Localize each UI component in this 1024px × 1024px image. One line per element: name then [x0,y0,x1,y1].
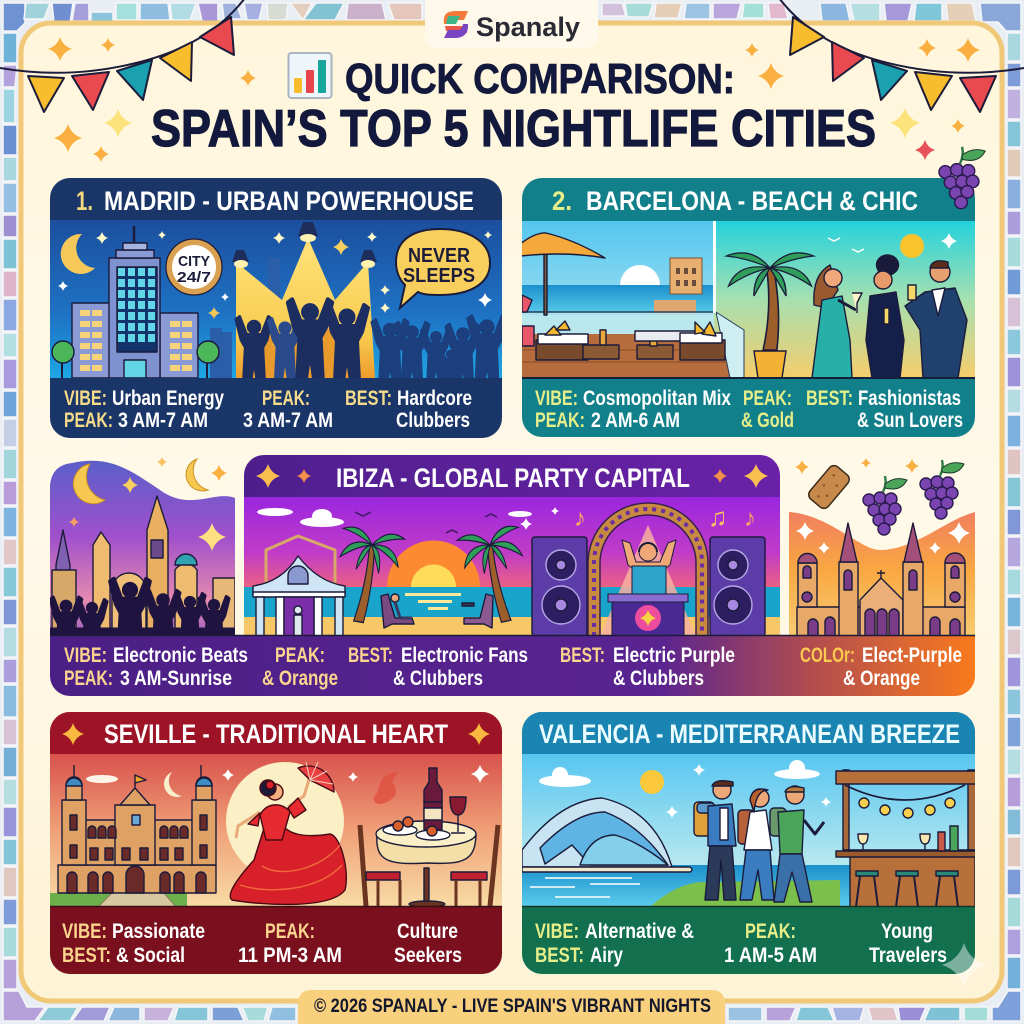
flamenco dancer [230,762,346,904]
Valencia stats: Alternative & [585,920,694,943]
Ibiza stats: & Clubbers [393,667,483,690]
bunting right [779,0,1024,112]
spotlights [232,222,377,378]
Valencia scene [522,754,976,907]
music notes: ♪ [574,505,586,532]
Ibiza footer band [50,636,975,696]
Madrid stats: Hardcore [397,387,472,410]
Barcelona stats: Cosmopolitan Mix [583,387,731,410]
Madrid heading: MADRID - URBAN POWERHOUSE [104,186,474,216]
Madrid stats: VIBE: [64,387,107,410]
beach chairs [381,594,493,628]
sparkles right [795,458,919,474]
icon: grapes [920,460,964,519]
Ibiza cathedral [797,523,965,636]
backpackers [694,781,824,902]
moon and stars [157,457,227,491]
Barcelona stats: BEST: [806,387,853,410]
Ibiza heading: IBIZA - GLOBAL PARTY CAPITAL [336,463,690,493]
music notes: ♪ [744,505,756,532]
Ibiza stats: 3 AM-Sunrise [120,667,232,690]
moon left [73,464,105,504]
icon: grapes top right [939,147,985,209]
Barcelona stats: 2 AM-6 AM [591,409,680,432]
decorative sparkles [48,37,980,162]
music notes [576,511,754,526]
Seville stats: Culture [397,920,458,943]
elegant guests [812,255,967,378]
footer pill [298,990,725,1024]
lounge furniture [522,295,725,360]
parasol [522,232,606,316]
Ibiza left skyline scene [50,460,235,635]
Barcelona stats: & Sun Lovers [857,409,963,432]
Ibiza stats: & Orange [843,667,920,690]
bunting left [0,0,245,112]
Ibiza stats: PEAK: [275,644,325,667]
music notes: ♫ [708,502,728,532]
Valencia stats: Airy [590,944,623,967]
panel: Seville [50,712,502,974]
Ibiza stats: Electric Purple [613,644,735,667]
tapas table [360,768,498,907]
panel: Valencia [522,712,976,974]
Barcelona stats: & Gold [741,409,794,432]
Madrid stats [64,387,472,432]
Seville stats: PEAK: [265,920,315,943]
Seville scene [50,754,502,907]
Ibiza stats: VIBE: [64,644,107,667]
Seville stats [62,920,462,967]
Ibiza stats: COLOr: [800,644,855,667]
Ibiza scene [244,497,780,636]
Ibiza stats: & Clubbers [613,667,704,690]
Seville stats: Passionate [112,920,205,943]
logo pill [425,0,598,48]
logo pill: Spanaly [476,12,580,42]
Barcelona stats: PEAK: [535,409,585,432]
Ibiza stats: & Orange [262,667,338,690]
Seville heading: SEVILLE - TRADITIONAL HEART [104,719,448,749]
panel: Madrid [50,178,506,438]
palace [58,765,216,893]
Barcelona scene [505,221,975,378]
watermark sparkle [942,943,986,987]
Seville stats: Seekers [394,944,462,967]
Seville stats: 11 PM-3 AM [238,944,342,967]
Barcelona stats: PEAK: [743,387,792,410]
plant pot [754,351,786,378]
Madrid scene [50,220,506,386]
Barcelona stats: VIBE: [535,387,578,410]
Ibiza stats: PEAK: [64,667,113,690]
Seville stats: & Social [116,944,185,967]
Barcelona heading: BARCELONA - BEACH & CHIC [586,186,918,216]
Valencia stats: VIBE: [535,920,579,943]
title [151,53,876,158]
Madrid heading: 1. [76,186,93,216]
Madrid stats: Urban Energy [112,387,224,410]
clock: City 24/7: 24/7 [177,269,211,286]
speech bubble: Never Sleeps [396,229,490,308]
title: SPAIN’S TOP 5 NIGHTLIFE CITIES [151,100,876,158]
Seville stats: VIBE: [62,920,107,943]
Madrid stats: PEAK: [64,409,113,432]
Valencia stats: Travelers [869,944,947,967]
DJ booth and arch [588,503,708,636]
icon: grapes [863,476,907,535]
Madrid stats: Clubbers [396,409,470,432]
Ibiza stats: BEST: [560,644,605,667]
Valencia stats: 1 AM-5 AM [724,944,817,967]
speech bubble: Never Sleeps: SLEEPS [403,265,475,287]
Ibiza centre card [244,455,780,636]
clock: City 24/7: CITY [178,253,210,270]
Ibiza stats: Electronic Beats [113,644,248,667]
Ibiza stats [64,644,962,690]
Valencia stats: PEAK: [745,920,796,943]
icon: bar chart [288,53,332,98]
Madrid stats: PEAK: [262,387,310,410]
panel: Ibiza [50,455,975,696]
clock: City 24/7 [166,239,222,295]
Madrid stats: 3 AM-7 AM [243,409,333,432]
Valencia stats [535,920,947,967]
title: QUICK COMPARISON: [345,55,735,102]
Madrid stats: 3 AM-7 AM [118,409,208,432]
Ibiza stats: BEST: [348,644,393,667]
Madrid stats: BEST: [345,387,392,410]
speech bubble: Never Sleeps: NEVER [408,245,471,267]
Ibiza stats: Elect-Purple [862,644,962,667]
icon: cork [806,463,852,511]
Ibiza stats: Electronic Fans [401,644,528,667]
Barcelona heading: 2. [552,186,572,216]
Valencia stats: BEST: [535,944,584,967]
Palau de les Arts [522,798,692,872]
beach bar [836,770,976,907]
speakers [532,537,765,636]
Seville stats: BEST: [62,944,111,967]
beach club [253,536,345,636]
buildings [52,226,219,378]
Barcelona stats [535,387,963,432]
Valencia stats: Young [881,920,933,943]
footer pill: © 2026 SPANALY - LIVE SPAIN'S VIBRANT NIGHTS [314,996,711,1017]
Barcelona stats: Fashionistas [858,387,961,410]
Ibiza right wavy sky [789,505,975,636]
panel: Barcelona [505,178,975,437]
crowd silhouettes [264,329,335,374]
